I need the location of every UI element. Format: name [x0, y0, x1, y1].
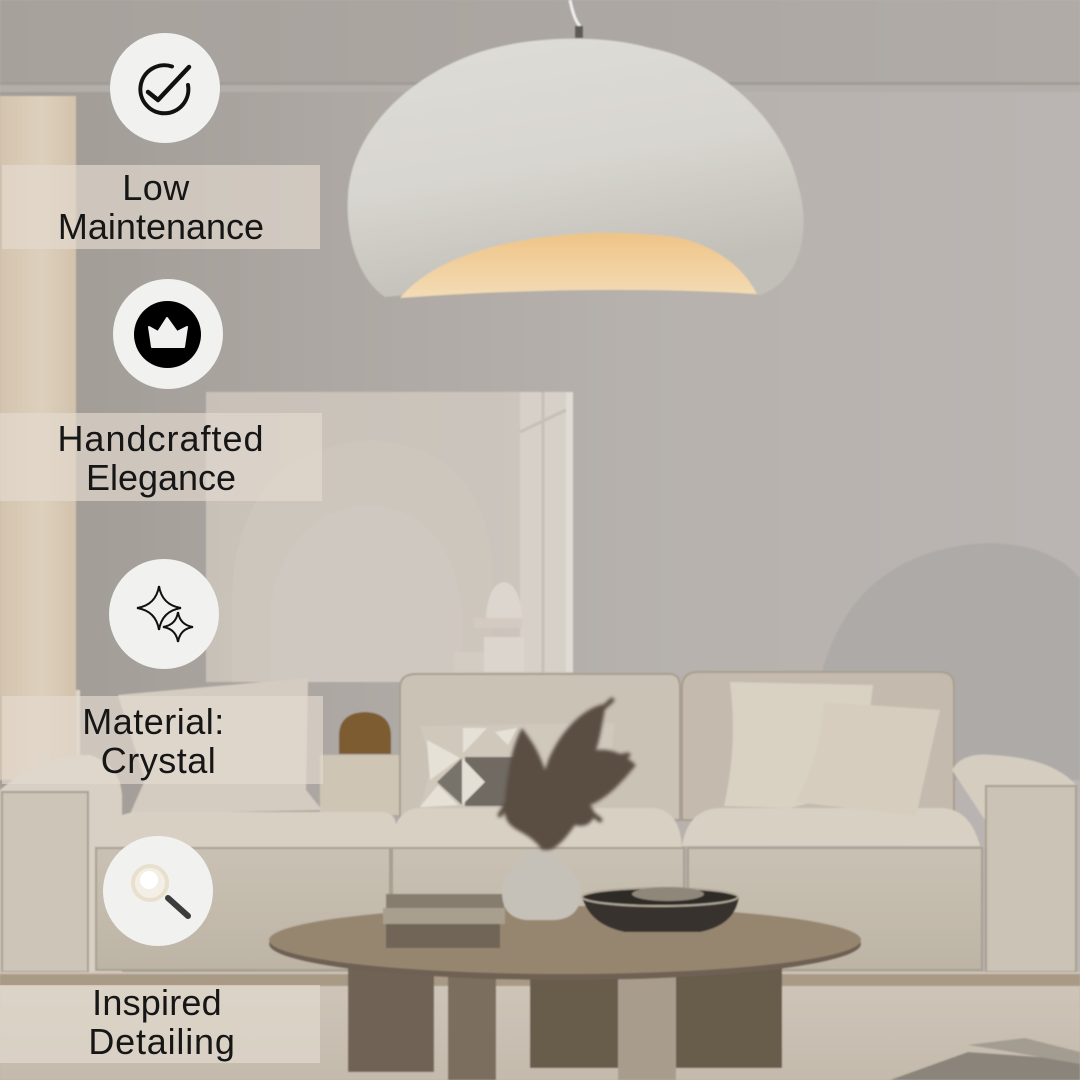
bowl	[582, 887, 739, 932]
feature: inspired detailing	[0, 836, 320, 1063]
icon: sparkles	[109, 559, 219, 669]
pendant lamp	[348, 0, 804, 298]
ceiling and moulding	[0, 0, 1080, 92]
label: inspired detailing: Inspired	[92, 982, 222, 1023]
icon: check mark badge	[110, 33, 220, 143]
label: handcrafted elegance	[0, 413, 322, 501]
feature: handcrafted elegance	[0, 279, 322, 501]
coffee table	[269, 906, 861, 1080]
wall arch niche	[820, 543, 1080, 780]
label: material crystal: Material:	[82, 701, 225, 742]
sofa	[0, 672, 1076, 975]
dried pampas plant	[500, 700, 636, 850]
column	[0, 96, 80, 780]
label: inspired detailing: Detailing	[88, 1021, 236, 1062]
label: low maintenance: Maintenance	[58, 206, 264, 247]
left background cushion	[118, 678, 322, 814]
label: low maintenance: Low	[122, 167, 190, 208]
wall art	[206, 392, 573, 682]
icon: crown	[113, 279, 223, 389]
floor and rug	[0, 972, 1080, 1080]
label: handcrafted elegance: Elegance	[86, 457, 236, 498]
vase	[502, 850, 581, 920]
label: handcrafted elegance: Handcrafted	[57, 418, 265, 459]
feature: material crystal	[2, 559, 323, 784]
label: inspired detailing	[0, 985, 320, 1063]
label: material crystal: Crystal	[101, 740, 216, 781]
books	[383, 894, 505, 948]
icon: magnifying glass	[103, 836, 213, 946]
label: material crystal	[2, 696, 323, 784]
label: low maintenance	[2, 165, 320, 249]
side table and niche	[320, 712, 400, 815]
feature: low maintenance	[2, 33, 320, 249]
cushions	[420, 682, 940, 816]
